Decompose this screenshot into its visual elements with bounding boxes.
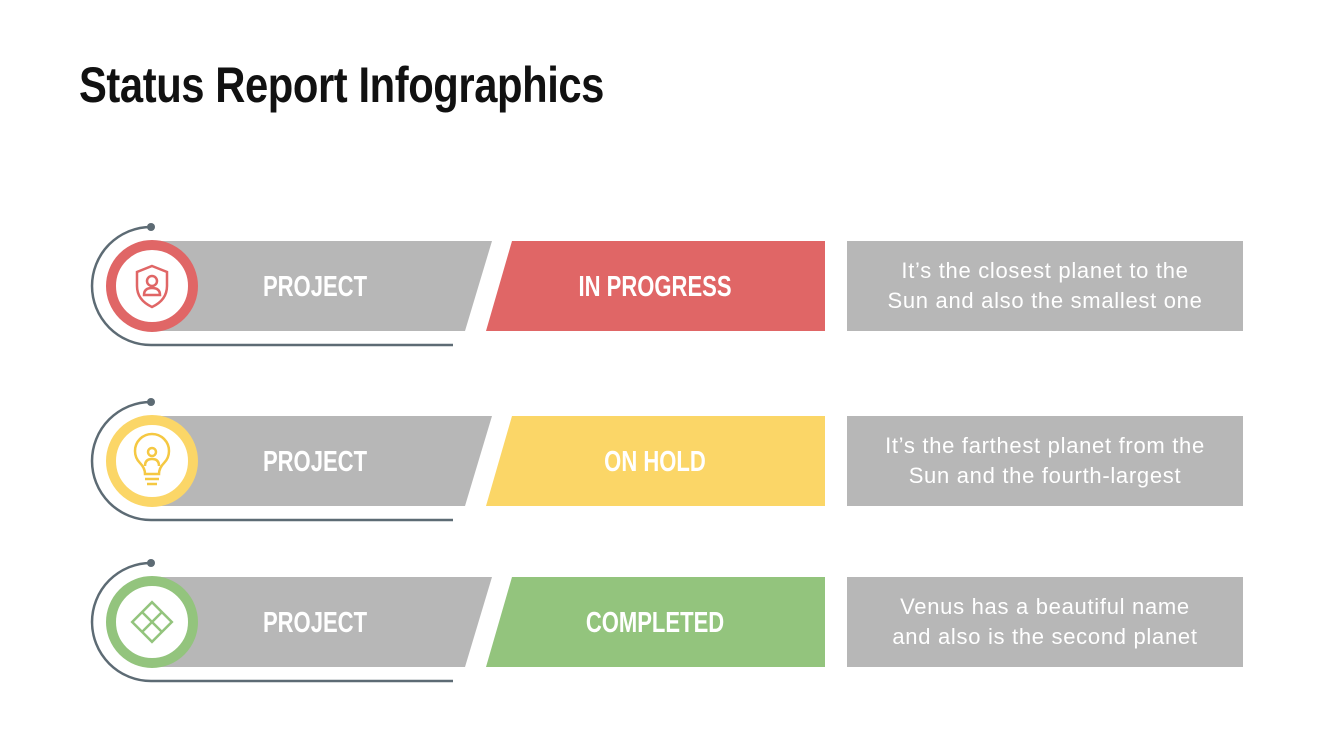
label: completed: COMPLETED xyxy=(586,607,724,639)
shapes: arc, bars, icon xyxy=(90,398,825,522)
description xyxy=(847,416,1243,506)
description: Sun and also the smallest one xyxy=(887,288,1203,313)
shapes: arc, bars, icon xyxy=(90,559,825,682)
label: on hold: ON HOLD xyxy=(604,446,706,478)
row: completed xyxy=(90,559,1243,682)
row: on hold xyxy=(90,398,1243,522)
description xyxy=(847,577,1243,667)
description: and also is the second planet xyxy=(892,624,1198,649)
description: Venus has a beautiful name xyxy=(900,594,1190,619)
description xyxy=(847,241,1243,331)
description: It’s the farthest planet from the xyxy=(885,433,1205,458)
description: It’s the closest planet to the xyxy=(901,258,1189,283)
title: Status Report Infographics xyxy=(79,57,604,113)
description: Sun and the fourth-largest xyxy=(909,463,1181,488)
label: project: PROJECT xyxy=(263,446,367,478)
label: project: PROJECT xyxy=(263,271,367,303)
label: project: PROJECT xyxy=(263,607,367,639)
label: in progress: IN PROGRESS xyxy=(578,271,732,303)
shapes: arc, bars, icon xyxy=(90,223,825,346)
row: in progress xyxy=(90,223,1243,346)
